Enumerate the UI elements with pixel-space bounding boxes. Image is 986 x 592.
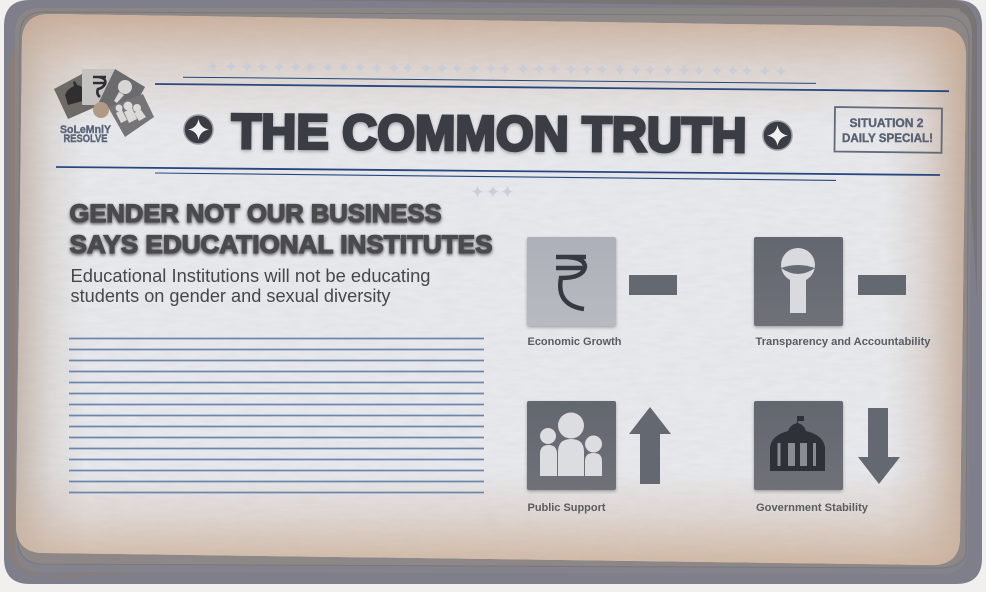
title ornament: right star badge: [763, 121, 792, 150]
indicator: Transparency and Accountability: [754, 237, 931, 348]
masthead title: THE COMMON TRUTH: [231, 105, 747, 163]
headline: [70, 200, 492, 259]
row of decorative stars above masthead: [207, 61, 787, 76]
indicator: Public Support: [527, 401, 671, 514]
indicator: Economic Growth: [527, 237, 677, 348]
logo card: government: [54, 74, 100, 119]
article body placeholder lines: [69, 338, 484, 492]
icon: government building tile: [754, 401, 843, 490]
down arrow: [858, 408, 900, 484]
small stars below masthead: [472, 186, 513, 197]
up arrow: [629, 407, 671, 484]
headline: SAYS EDUCATIONAL INSTITUTES: [70, 231, 492, 259]
subheading: Educational Institutions will not be educating: [70, 266, 430, 286]
edition stamp: SITUATION 2: [850, 116, 924, 130]
icon: rupee tile: [527, 237, 616, 326]
label: Transparency and Accountability: [756, 336, 931, 348]
label: Economic Growth: [528, 336, 622, 348]
logo card: people: [108, 94, 154, 137]
indicator: Government Stability: [754, 401, 900, 514]
logo: Solemnly Resolve: [54, 69, 154, 145]
masthead rules: [56, 77, 949, 180]
logo card: microphone: [99, 69, 145, 118]
flat trend bar: [629, 275, 677, 295]
subheading: students on gender and sexual diversity: [70, 286, 390, 306]
edition stamp: DAILY SPECIAL!: [842, 131, 933, 145]
logo card: rupee: [82, 69, 115, 105]
edition stamp: [834, 107, 942, 153]
label: Public Support: [528, 502, 606, 514]
logo wordmark: SoLeMnlY: [60, 124, 112, 136]
icon: people tile: [527, 401, 616, 490]
logo wordmark: [60, 124, 112, 145]
headline: GENDER NOT OUR BUSINESS: [70, 200, 442, 228]
subheading: [70, 266, 430, 306]
icon: microphone tile: [754, 237, 843, 326]
label: Government Stability: [756, 502, 869, 514]
flat trend bar: [858, 275, 906, 295]
logo dot: [93, 102, 109, 118]
logo wordmark: RESOLVE: [64, 133, 108, 145]
title ornament: left star badge: [184, 115, 213, 144]
